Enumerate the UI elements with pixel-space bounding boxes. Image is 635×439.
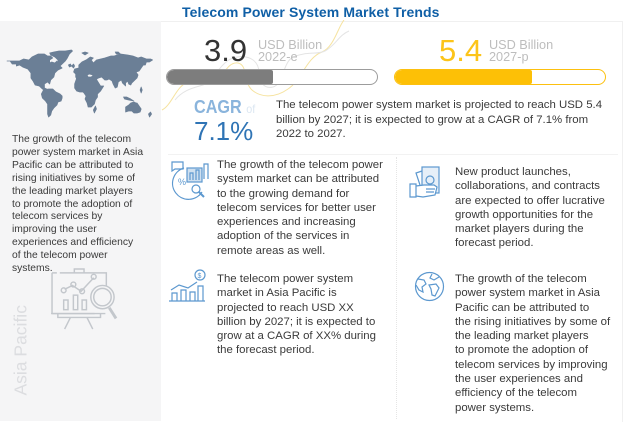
sidebar text: The growth of the telecom [12, 134, 131, 145]
icon: globe [414, 272, 444, 302]
sidebar text: rising initiatives by some of [12, 173, 135, 184]
stat: 2022 value [204, 33, 322, 68]
text: Asia Pacific market: market in Asia Pacific is [217, 287, 337, 299]
icon: presentation board with magnifier [51, 268, 118, 330]
value 3.9: 3.9 [204, 33, 247, 68]
sidebar text: the leading market players [12, 186, 133, 197]
text: new product launches: are expected to offer lucrative [455, 195, 605, 207]
sidebar text: of the telecom power [12, 250, 108, 261]
unit 2027-p: 2027-p [489, 50, 529, 64]
text: growth drivers: telecom services for better user [217, 202, 376, 214]
bar fill [395, 70, 532, 84]
unit 2022-e [258, 38, 322, 64]
text: growth drivers: to the growing demand for [217, 188, 349, 200]
main panel outline [161, 21, 623, 422]
text: new product launches: market players during the [455, 223, 584, 235]
panel: Asia Pacific sidebar [0, 21, 161, 421]
text: Asia Pacific market: projected to reach USD XX [217, 302, 354, 314]
sidebar text: Pacific can be attributed to [12, 160, 133, 171]
CAGR value: 7.1% [194, 116, 253, 146]
text: growth drivers: system market can be attributed [217, 173, 379, 185]
CAGR label: CAGR of [194, 97, 255, 117]
text: growth drivers: adoption of the services in [217, 230, 349, 242]
bar fill [167, 70, 273, 84]
text: growth drivers: experiences and increasing [217, 216, 356, 228]
text: Asia Pacific initiatives: power systems. [455, 402, 534, 414]
text: Asia Pacific initiatives: efficiency of the telecom [455, 387, 577, 399]
CAGR text: 2022 to 2027. [276, 128, 346, 140]
sidebar text: improving the user [12, 224, 97, 235]
icon: growth bars with dollar: $ [198, 273, 202, 280]
text: Asia Pacific market: grow at a CAGR of XX% during [217, 330, 376, 342]
sidebar text [12, 134, 144, 274]
CAGR text: The telecom power system market is projected to reach USD 5.4 [276, 99, 602, 111]
icon: chart and percent: % [178, 177, 186, 187]
sidebar text: power system market in Asia [12, 147, 143, 158]
unit 2027-p [489, 38, 553, 64]
CAGR text [276, 99, 602, 140]
text: growth drivers: The growth of the telecom power [217, 159, 383, 171]
rotated label: Asia Pacific: Asia Pacific [10, 305, 30, 396]
text: Asia Pacific initiatives: Pacific can be attributed to [455, 302, 589, 314]
text: new product launches: collaborations, and contracts [455, 180, 600, 192]
unit 2022-e: USD Billion [258, 38, 322, 52]
sidebar text: to promote the adoption of [12, 199, 132, 210]
text: growth drivers [217, 159, 383, 257]
text: Asia Pacific initiatives: the leading market players [455, 330, 589, 342]
CAGR text: billion by 2027; it is expected to grow at a CAGR of 7.1% from [276, 114, 588, 126]
text: Asia Pacific market [217, 273, 376, 356]
sidebar text: systems. [12, 263, 53, 274]
text: new product launches: forecast period. [455, 237, 534, 249]
text: Asia Pacific initiatives: The growth of the telecom [455, 273, 587, 285]
icon: growth bars with dollar [169, 269, 206, 302]
text: Asia Pacific market: the forecast period. [217, 344, 315, 356]
decorative wave lines [162, 20, 349, 110]
text: growth drivers: remote areas as well. [217, 245, 325, 257]
sidebar text: telecom services by [12, 211, 102, 222]
text: new product launches [455, 166, 605, 249]
unit 2022-e: 2022-e [258, 50, 298, 64]
title: Telecom Power System Market Trends [182, 4, 440, 20]
text: Asia Pacific initiatives: telecom services by improving [455, 359, 608, 371]
text: Asia Pacific market: The telecom power system [217, 273, 353, 285]
sidebar text: experiences and efficiency [12, 237, 133, 248]
text: new product launches: growth opportunities for the [455, 209, 593, 221]
text: Asia Pacific initiatives: power system market in Asia [455, 287, 600, 299]
divider [396, 157, 398, 419]
progress bar 2027 [394, 69, 606, 85]
text: Asia Pacific initiatives: the rising initiatives by some of [455, 316, 610, 328]
text: Asia Pacific initiatives: the user experiences and [455, 373, 583, 385]
progress bar 2022 [166, 69, 378, 85]
CAGR callout [194, 97, 256, 146]
icon: chart and percent [171, 161, 209, 200]
world map [6, 50, 153, 118]
divider top [168, 154, 618, 155]
text: Asia Pacific initiatives: to promote the adoption of [455, 344, 588, 356]
text: new product launches: New product launches, [455, 166, 571, 178]
text: Asia Pacific market: billion by 2027; it is expected to [217, 316, 375, 328]
icon: hand with cash [409, 166, 440, 198]
text: Asia Pacific initiatives [455, 273, 610, 414]
value 5.4: 5.4 [439, 33, 482, 68]
stat: 2027 value [439, 33, 553, 68]
unit 2027-p: USD Billion [489, 38, 553, 52]
